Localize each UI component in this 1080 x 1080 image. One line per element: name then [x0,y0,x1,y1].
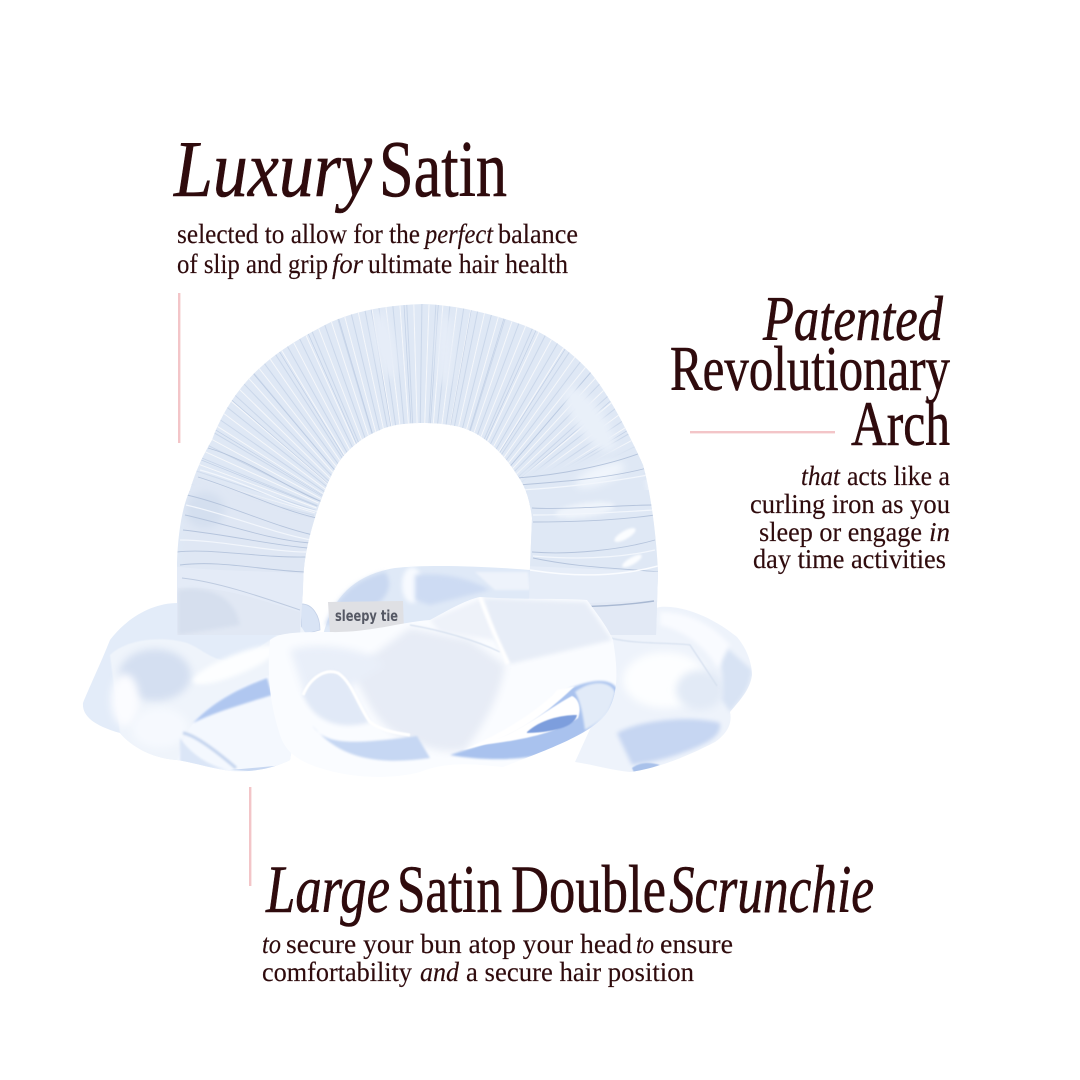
text block: luxury satin description: for [332,249,363,279]
side folds [178,446,658,572]
front scrunchie lobe [269,597,616,762]
infographic canvas [83,142,950,988]
text block: luxury satin description: perfect [423,219,494,249]
left scrunchie lobes [83,603,305,772]
heading: Large Satin Double Scrunchie: Satin [397,851,502,927]
product illustration: satin arch with double scrunchie [75,295,760,785]
satin arch with pleats [170,295,670,640]
text block: arch description: sleep or engage [759,517,922,547]
text block: arch description: day time activities [753,544,946,574]
text block: scrunchie description: ensure [660,929,733,959]
text block: scrunchie description: and [420,957,459,987]
heading: Patented Revolutionary Arch: Arch [851,389,950,459]
heading: Luxury Satin: Luxury [173,126,372,214]
text block: scrunchie description: to [262,929,281,959]
decorative callout line: luxury satin [178,293,180,443]
text block: arch description: that [801,461,841,491]
heading: Large Satin Double Scrunchie: Large [265,851,390,927]
curl fold [450,681,618,759]
text block: luxury satin description: ultimate hair health [368,249,568,279]
back scrunchie bump [322,566,545,640]
text block: arch description: curling iron as you [750,489,950,519]
decorative callout line: revolutionary arch [690,431,835,433]
text block: scrunchie description: comfortability [262,957,412,987]
text block: arch description: in [929,517,950,547]
arch lower satin bands [181,566,658,632]
text block: luxury satin description [177,219,578,279]
decorative callout line: scrunchie [249,787,251,886]
scrunchie knot beside tag [300,604,320,635]
heading: Luxury Satin: Satin [379,126,507,214]
heading: Luxury Satin [173,126,507,214]
text block: luxury satin description: selected to allow for the [177,219,420,249]
heading: Large Satin Double Scrunchie: Scrunchie [669,851,874,927]
text block: luxury satin description: of slip and grip [177,249,328,279]
heading: Large Satin Double Scrunchie: Double [511,851,666,927]
heading: Large Satin Double Scrunchie [265,851,874,927]
top pleats [228,362,610,500]
fabric tag with logo: sleepy tie [335,607,398,625]
fabric tag with logo [328,601,404,634]
text block: scrunchie description: a secure hair position [466,957,694,987]
heading: Patented Revolutionary Arch: Revolutionary [670,334,950,404]
text block: luxury satin description: balance [498,219,578,249]
text block: arch description [750,461,950,574]
heading: Patented Revolutionary Arch: Patented [762,284,943,354]
text block: arch description: acts like a [847,461,950,491]
heading: Patented Revolutionary Arch [670,284,950,459]
text block: scrunchie description: to [636,929,654,959]
right scrunchie lobes [575,606,752,772]
text block: scrunchie description [262,929,733,987]
text block: scrunchie description: secure your bun atop your head [286,929,633,959]
